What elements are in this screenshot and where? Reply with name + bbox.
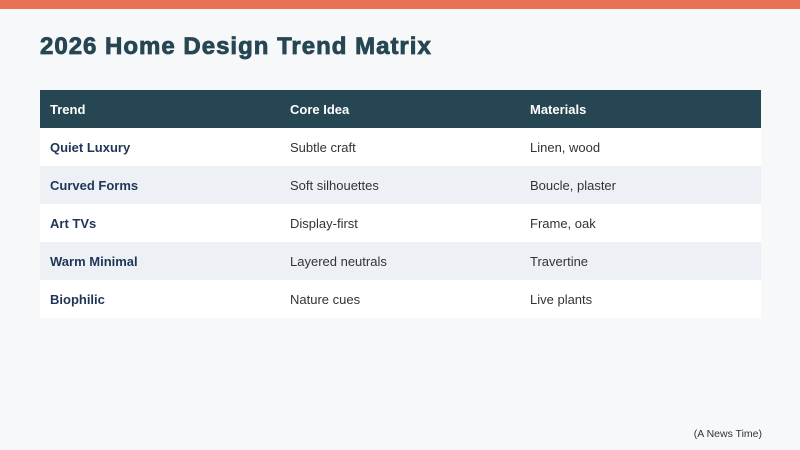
- table: trend matrix: Core Idea: [290, 102, 349, 116]
- table: trend matrix: Layered neutrals: [290, 254, 387, 268]
- table: trend matrix: Warm Minimal: [50, 254, 138, 268]
- table: trend matrix: Materials: [530, 102, 586, 116]
- table: trend matrix: Curved Forms: [50, 178, 138, 192]
- table: trend matrix: Art TVs: [50, 216, 96, 230]
- table: trend matrix: Nature cues: [290, 292, 360, 306]
- table: trend matrix: Display-first: [290, 216, 358, 230]
- table: trend matrix: Subtle craft: [290, 140, 356, 154]
- table: trend matrix: Frame, oak: [530, 216, 596, 230]
- source note: (A News Time): [694, 428, 762, 440]
- title: 2026 Home Design Trend Matrix: [40, 33, 432, 60]
- table: trend matrix: [40, 90, 761, 306]
- table: trend matrix: Boucle, plaster: [530, 178, 616, 192]
- table: trend matrix: Soft silhouettes: [290, 178, 379, 192]
- top accent bar: [0, 0, 800, 9]
- table: trend matrix: Trend: [50, 102, 85, 116]
- table: trend matrix: Travertine: [530, 254, 588, 268]
- table: trend matrix: Quiet Luxury: [50, 140, 130, 154]
- table: trend matrix: Linen, wood: [530, 140, 600, 154]
- table: trend matrix: Live plants: [530, 292, 592, 306]
- table: trend matrix: Biophilic: [50, 292, 105, 306]
